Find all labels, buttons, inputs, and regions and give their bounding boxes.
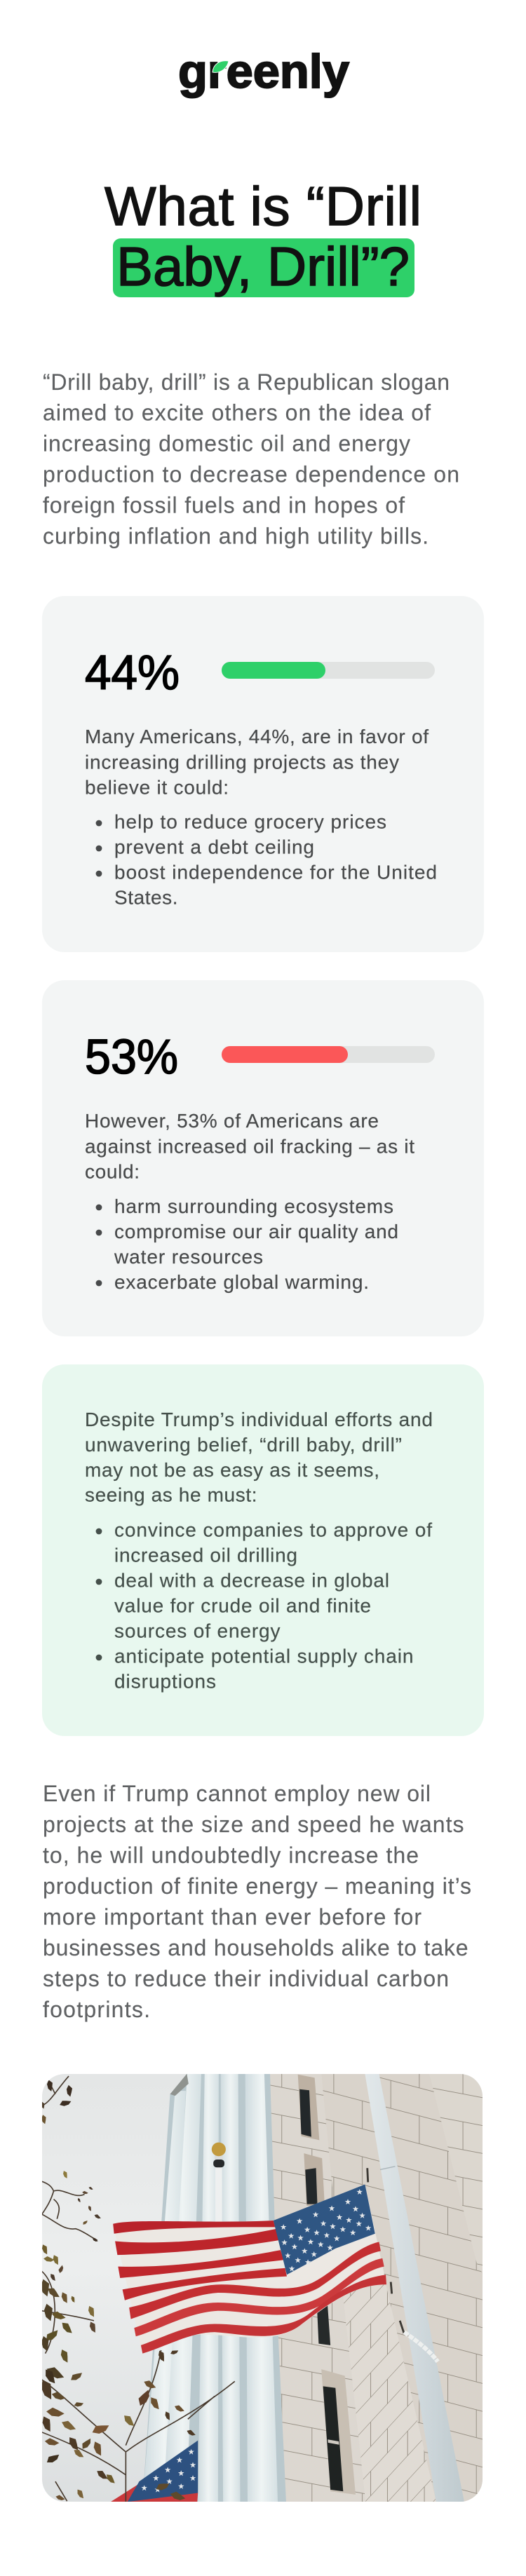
panel text <box>85 1409 433 1506</box>
foreground flagpole <box>365 2074 464 2502</box>
progress bar: 44% <box>222 662 435 679</box>
closing paragraph: more important than ever before for <box>43 1904 422 1930</box>
bullet list <box>96 1519 432 1693</box>
closing paragraph: steps to reduce their individual carbon <box>43 1966 449 1991</box>
bullet list: compromise our air quality and <box>114 1221 398 1242</box>
bullet list: increased oil drilling <box>114 1545 297 1566</box>
intro paragraph: curbing inflation and high utility bills. <box>43 523 429 548</box>
windows <box>298 2075 356 2495</box>
panel: 44 percent in favor <box>42 596 484 952</box>
panel text: Despite Trump’s individual efforts and <box>85 1409 433 1430</box>
bullet list: harm surrounding ecosystems <box>114 1195 393 1217</box>
background flagpole and finial <box>212 2143 226 2227</box>
closing paragraph: Even if Trump cannot employ new oil <box>43 1781 431 1806</box>
stat: 44%: 44% <box>85 645 180 700</box>
stat: 53%: 53% <box>85 1029 178 1084</box>
bullet list: convince companies to approve of <box>114 1519 432 1541</box>
intro paragraph: aimed to excite others on the idea of <box>43 400 431 425</box>
closing paragraph: to, he will undoubtedly increase the <box>43 1843 419 1868</box>
bullet list: help to reduce grocery prices <box>114 811 386 833</box>
closing paragraph: footprints. <box>43 1997 150 2022</box>
bullet list: boost independence for the United <box>114 862 437 883</box>
bullet list: prevent a debt ceiling <box>114 836 314 858</box>
panel text: Many Americans, 44%, are in favor of <box>85 726 429 747</box>
colonnade <box>142 2074 286 2502</box>
intro paragraph: foreign fossil fuels and in hopes of <box>43 492 405 517</box>
panel text: seeing as he must: <box>85 1484 257 1506</box>
panel text <box>85 1110 414 1182</box>
closing paragraph: businesses and households alike to take <box>43 1935 468 1960</box>
closing paragraph: projects at the size and speed he wants <box>43 1812 464 1837</box>
main flag <box>113 2185 386 2354</box>
panel text: increasing drilling projects as they <box>85 752 399 773</box>
panel text: However, 53% of Americans are <box>85 1110 379 1132</box>
bullet list: exacerbate global warming. <box>114 1271 369 1293</box>
panel text: unwavering belief, “drill baby, drill” <box>85 1434 402 1456</box>
bullet list <box>96 1195 398 1293</box>
tree branches and leaves <box>39 2076 235 2502</box>
title highlight: Baby, Drill”? <box>116 236 410 297</box>
bullet list: disruptions <box>114 1671 216 1693</box>
panel: Trump's challenges <box>42 1364 484 1736</box>
building stone faces <box>270 2074 485 2502</box>
bullet list: States. <box>114 887 178 909</box>
panel text: against increased oil fracking – as it <box>85 1136 414 1157</box>
bullet list: anticipate potential supply chain <box>114 1646 414 1667</box>
intro paragraph: production to decrease dependence on <box>43 461 459 487</box>
panel text: may not be as easy as it seems, <box>85 1459 379 1481</box>
closing paragraph <box>43 1781 471 2022</box>
intro paragraph: “Drill baby, drill” is a Republican slogan <box>43 370 450 395</box>
bullet list: water resources <box>114 1246 263 1268</box>
bullet list: deal with a decrease in global <box>114 1570 389 1592</box>
panel text: could: <box>85 1160 140 1182</box>
second flag <box>111 2441 198 2502</box>
infographic canvas <box>42 53 484 2502</box>
panel: 53 percent against <box>42 980 484 1336</box>
progress bar: 53% <box>222 1046 435 1063</box>
photo: American flag on building <box>39 2074 485 2502</box>
title <box>104 175 422 297</box>
title: What is “Drill <box>104 175 422 237</box>
icon: green leaf on the r <box>213 61 229 72</box>
closing paragraph: production of finite energy – meaning it’s <box>43 1873 471 1899</box>
panel text: believe it could: <box>85 776 229 798</box>
bullet list <box>96 811 437 909</box>
bullet list: value for crude oil and finite <box>114 1595 371 1617</box>
bullet list: sources of energy <box>114 1620 281 1642</box>
intro paragraph <box>43 370 459 548</box>
intro paragraph: increasing domestic oil and energy <box>43 431 410 456</box>
panel text <box>85 726 429 798</box>
logo: greenly: greenly <box>178 45 349 98</box>
